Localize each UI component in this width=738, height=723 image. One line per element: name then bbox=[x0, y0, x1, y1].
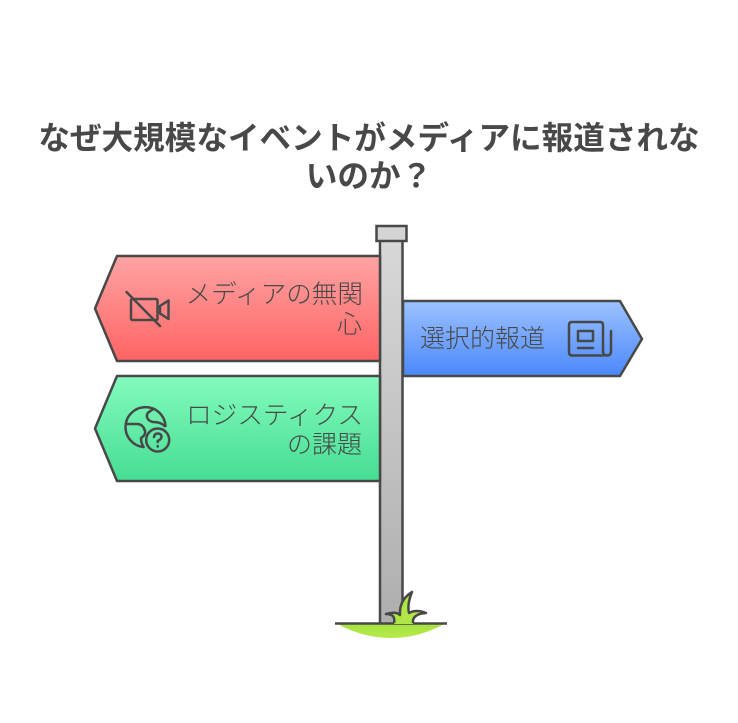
icon: globe with question mark bbox=[126, 407, 169, 452]
label: メディアの無関心: メディアの無関 bbox=[186, 280, 363, 309]
panel: 選択的報道 bbox=[403, 301, 642, 376]
label: ロジスティクスの課題 bbox=[186, 402, 363, 459]
title: いのか？ bbox=[306, 158, 432, 194]
panel: ロジスティクスの課題 bbox=[95, 376, 380, 481]
grass mound bbox=[335, 592, 447, 638]
label: 選択的報道: 選択的報道 bbox=[420, 325, 545, 353]
title bbox=[38, 120, 700, 194]
label: メディアの無関心 bbox=[186, 280, 363, 339]
panel: メディアの無関心 bbox=[95, 256, 380, 361]
label: メディアの無関心: 心 bbox=[337, 311, 362, 339]
title: なぜ大規模なイベントがメディアに報道されな bbox=[38, 120, 700, 156]
icon: newspaper bbox=[569, 322, 611, 356]
signpost pole bbox=[376, 226, 406, 625]
label: ロジスティクスの課題: の課題 bbox=[287, 431, 362, 459]
label: ロジスティクスの課題: ロジスティクス bbox=[186, 402, 363, 430]
icon: video camera off bbox=[126, 292, 168, 326]
